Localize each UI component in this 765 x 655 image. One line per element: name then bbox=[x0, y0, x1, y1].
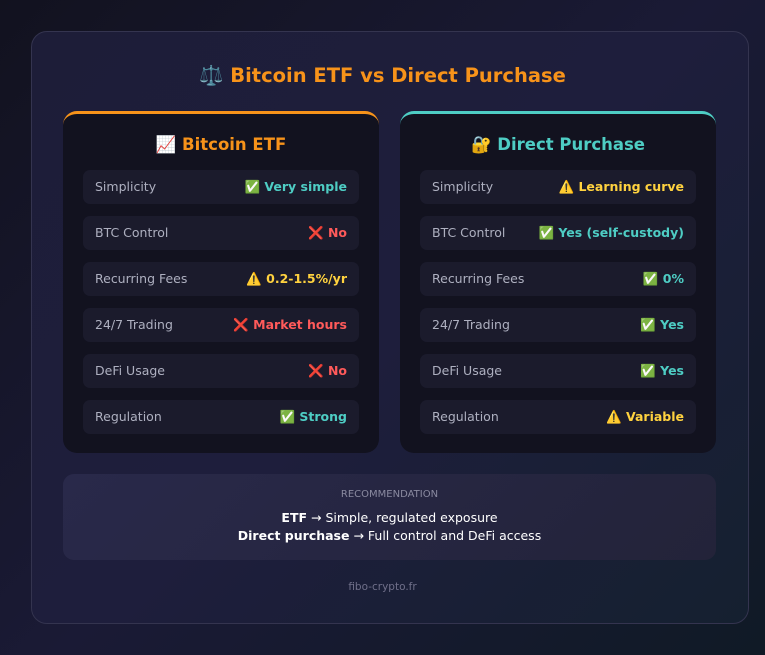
row: defi: DeFi Usage bbox=[95, 363, 165, 378]
row: simplicity bbox=[420, 170, 696, 204]
row: fees bbox=[83, 262, 359, 296]
row: regulation bbox=[420, 400, 696, 434]
row: simplicity bbox=[83, 170, 359, 204]
row: fees: Recurring Fees bbox=[432, 271, 524, 286]
panel: Direct Purchase bbox=[400, 111, 716, 453]
row: btc control: BTC Control bbox=[95, 225, 168, 240]
rec text: Direct purchase → Full control and DeFi access bbox=[238, 528, 541, 543]
rec label: RECOMMENDATION bbox=[341, 489, 438, 500]
row: fees: ✅ 0% bbox=[643, 271, 684, 286]
row: defi: ✅ Yes bbox=[640, 363, 684, 378]
row: trading bbox=[83, 308, 359, 342]
rec text bbox=[238, 510, 541, 543]
rec text: ETF → Simple, regulated exposure bbox=[281, 510, 498, 525]
row: regulation bbox=[83, 400, 359, 434]
panel heading: 🔐 Direct Purchase bbox=[471, 135, 645, 154]
row: trading: ✅ Yes bbox=[640, 317, 684, 332]
footer: fibo-crypto.fr bbox=[348, 581, 417, 593]
row: btc control: ❌ No bbox=[308, 225, 347, 240]
row: regulation: Regulation bbox=[432, 409, 499, 424]
row: btc control bbox=[420, 216, 696, 250]
row: trading: 24/7 Trading bbox=[432, 317, 510, 332]
row: defi: ❌ No bbox=[308, 363, 347, 378]
row: btc control bbox=[83, 216, 359, 250]
row: regulation: ✅ Strong bbox=[280, 409, 347, 424]
row: trading bbox=[420, 308, 696, 342]
row: simplicity: Simplicity bbox=[95, 179, 156, 194]
row: regulation: Regulation bbox=[95, 409, 162, 424]
panel heading: 📈 Bitcoin ETF bbox=[156, 135, 286, 154]
row: fees: Recurring Fees bbox=[95, 271, 187, 286]
row: defi: DeFi Usage bbox=[432, 363, 502, 378]
row: defi bbox=[420, 354, 696, 388]
row: btc control: ✅ Yes (self-custody) bbox=[538, 225, 684, 240]
title: ⚖️ Bitcoin ETF vs Direct Purchase bbox=[199, 64, 566, 87]
row: fees bbox=[420, 262, 696, 296]
row: regulation: ⚠️ Variable bbox=[606, 409, 684, 424]
panel: Bitcoin ETF bbox=[63, 111, 379, 453]
row: defi bbox=[83, 354, 359, 388]
row: trading: ❌ Market hours bbox=[233, 317, 347, 332]
row: trading: 24/7 Trading bbox=[95, 317, 173, 332]
row: simplicity: Simplicity bbox=[432, 179, 493, 194]
recommendation box bbox=[63, 474, 716, 560]
row: fees: ⚠️ 0.2-1.5%/yr bbox=[246, 271, 347, 286]
row: simplicity: ⚠️ Learning curve bbox=[559, 179, 684, 194]
row: btc control: BTC Control bbox=[432, 225, 505, 240]
row: simplicity: ✅ Very simple bbox=[244, 179, 347, 194]
